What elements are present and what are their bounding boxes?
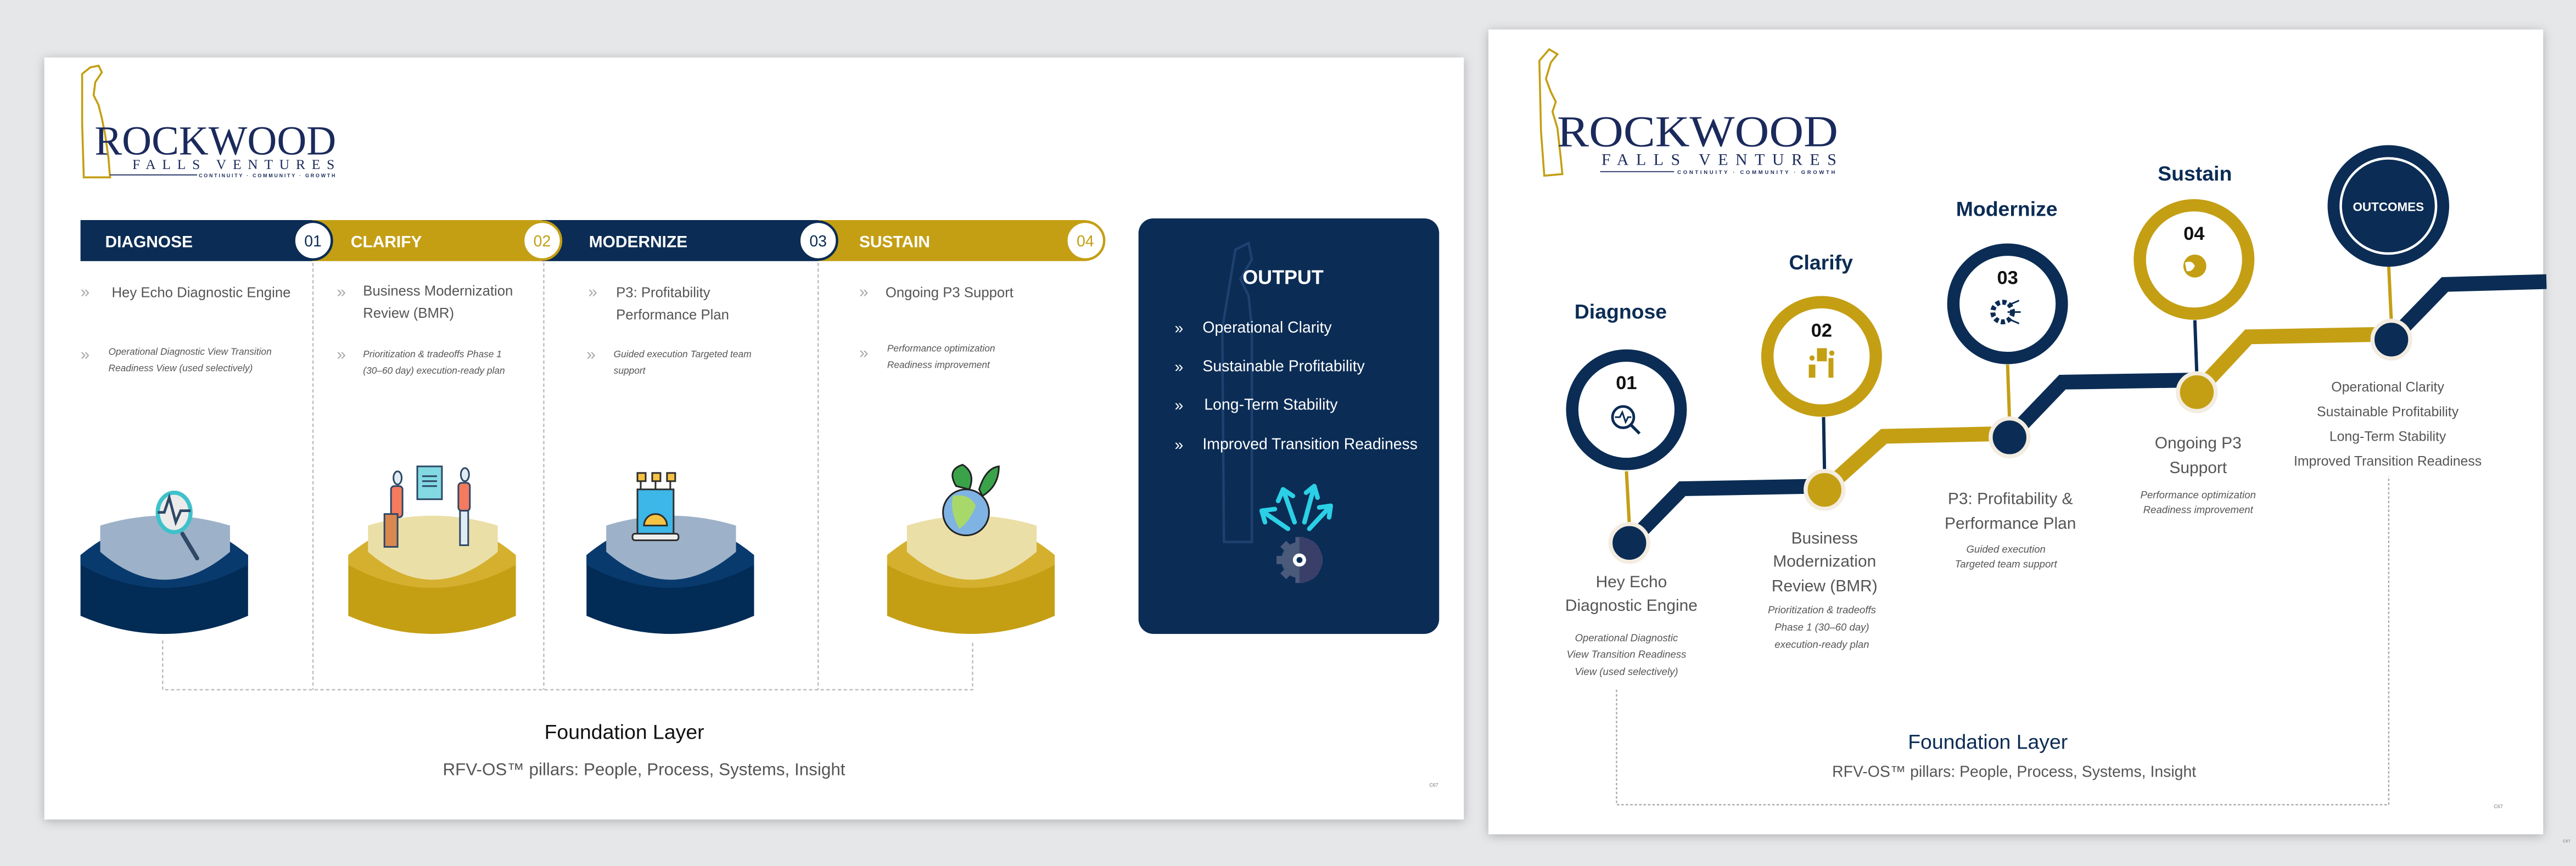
text block: clarify items: » [337,345,346,363]
stage: outcomes: Long-Term Stability [2329,429,2446,444]
list: output items: Sustainable Profitability [1202,357,1365,375]
text block: modernize items: » [588,283,597,301]
stage: clarify: Business [1791,529,1858,547]
stage: clarify: execution-ready plan [1774,639,1869,650]
header bar: phases: 02 [534,233,551,250]
pedestal: diagnose [81,493,248,634]
stage: sustain: Sustain [2158,162,2232,185]
logo: left [82,66,336,178]
text block: sustain items: Readiness improvement [887,359,990,370]
stage: modernize: 03 [1997,268,2018,289]
text: C67 [2563,839,2571,843]
heading: foundation layer (right): Foundation Layer [1908,730,2068,753]
text block: modernize items: Performance Plan [616,307,729,323]
stage: modernize: Performance Plan [1945,515,2076,533]
icon: globe with leaves [943,465,999,536]
text block: diagnose items: Operational Diagnostic View Transition [108,346,272,357]
logo: right: FALLS VENTURES [1601,151,1836,169]
panel: output: OUTPUT [1242,267,1324,289]
icon: laptop gear [632,473,679,541]
pedestal: clarify [348,466,516,634]
text: pillars (right): RFV-OS™ pillars: People, Process, Systems, Insight [1832,763,2196,780]
stage: diagnose: View Transition Readiness [1566,648,1686,660]
stage: sustain: Readiness improvement [2143,504,2254,515]
text block: diagnose items: » [81,283,89,301]
stage: sustain: 04 [2183,223,2204,244]
list: output items: » [1175,358,1183,376]
header bar: phases: MODERNIZE [589,233,687,251]
stage: outcomes: Sustainable Profitability [2317,405,2459,420]
pedestal: modernize [586,473,754,634]
heading: foundation layer (left): Foundation Layer [545,721,704,744]
header bar: phases: CLARIFY [351,233,422,251]
stage: diagnose: Diagnostic Engine [1565,597,1698,615]
stage: clarify: Modernization [1773,552,1876,570]
header bar: phases: DIAGNOSE [105,233,193,251]
stage: diagnose: Diagnose [1575,300,1667,323]
stage: diagnose: Operational Diagnostic [1575,632,1678,644]
icon: people presenting [384,466,470,547]
stage: clarify [1767,251,1878,650]
stage: diagnose: Hey Echo [1596,573,1667,591]
logo: right: CONTINUITY · COMMUNITY · GROWTH [1677,170,1835,176]
text block: diagnose items: Readiness View (used selectively) [108,362,253,373]
panel: left slide: C67 [1429,782,1438,788]
stage: outcomes: Operational Clarity [2331,380,2444,395]
stage: clarify: Prioritization & tradeoffs [1768,604,1876,616]
stage: clarify: Phase 1 (30–60 day) [1774,621,1869,633]
list: output items [1175,319,1418,454]
stage: modernize: Modernize [1956,198,2058,221]
text block: modernize items: P3: Profitability [616,285,710,301]
panel: right slide: C67 [2494,803,2503,809]
icon: arrows and gear [1262,486,1331,583]
stage: outcomes: Improved Transition Readiness [2294,454,2482,469]
text block: clarify items: » [337,283,346,301]
stage: clarify: Review (BMR) [1772,577,1878,595]
list: output items: » [1175,397,1183,414]
text block: modernize items: » [586,345,596,363]
logo: right: ROCKWOOD [1557,107,1838,156]
stage: diagnose: View (used selectively) [1575,666,1678,677]
text block: clarify items: Prioritization & tradeoffs Phase 1 [363,348,502,359]
pedestal: sustain [887,465,1055,634]
text block: sustain items [859,283,1013,370]
logo: right [1539,49,1838,176]
header bar: phases: 03 [809,233,827,250]
list: output items: » [1175,436,1183,454]
stage: diagnose: 01 [1616,373,1637,393]
stage: clarify: Clarify [1789,251,1853,274]
text block: clarify items [337,283,513,376]
stage: modernize: Guided execution [1966,543,2046,555]
header bar: phases: 01 [304,233,322,250]
text block: diagnose items [81,283,290,373]
stage: modernize: Targeted team support [1955,558,2057,570]
stage: outcomes: OUTCOMES [2353,200,2424,214]
logo: left: FALLS VENTURES [132,156,334,172]
text block: modernize items: Guided execution Targeted team [614,348,752,359]
panel: output [1139,218,1439,634]
list: output items: » [1175,319,1183,337]
logo: left: CONTINUITY · COMMUNITY · GROWTH [199,173,335,178]
header bar: phases: SUSTAIN [859,233,930,251]
stage: clarify: 02 [1811,320,1832,341]
text block: modernize items: support [614,365,646,376]
stage: modernize: P3: Profitability & [1948,490,2073,508]
text block: modernize items [586,283,752,376]
list: output items: Operational Clarity [1202,319,1332,336]
list: output items: Long-Term Stability [1204,396,1338,414]
text block: sustain items: Ongoing P3 Support [886,285,1013,301]
text block: sustain items: » [859,283,869,301]
chart: journey path [1629,282,2546,543]
stage: sustain: Support [2169,459,2227,477]
text block: sustain items: » [859,344,869,362]
stage: modernize [1945,198,2076,570]
text block: diagnose items: Hey Echo Diagnostic Engine [111,285,290,301]
text block: clarify items: Business Modernization [363,284,513,299]
text: pillars (left): RFV-OS™ pillars: People, Process, Systems, Insight [443,760,845,779]
stage: sustain: Performance optimization [2141,489,2256,501]
stage: outcomes [2294,145,2482,469]
list: output items: Improved Transition Readiness [1202,435,1418,453]
text block: clarify items: (30–60 day) execution-ready plan [363,365,505,376]
panel: left slide [44,58,1464,819]
header bar: phases: 04 [1077,233,1094,250]
stage: sustain [2140,162,2256,515]
stage: sustain: Ongoing P3 [2155,434,2242,452]
text block: clarify items: Review (BMR) [363,306,454,321]
stage: diagnose [1565,300,1698,677]
icon: magnifier pulse [158,493,197,558]
text block: sustain items: Performance optimization [887,342,995,353]
logo: left: ROCKWOOD [94,118,336,164]
panel: right slide [1488,30,2546,834]
text block: diagnose items: » [81,345,89,363]
header bar: phases [81,220,1105,261]
